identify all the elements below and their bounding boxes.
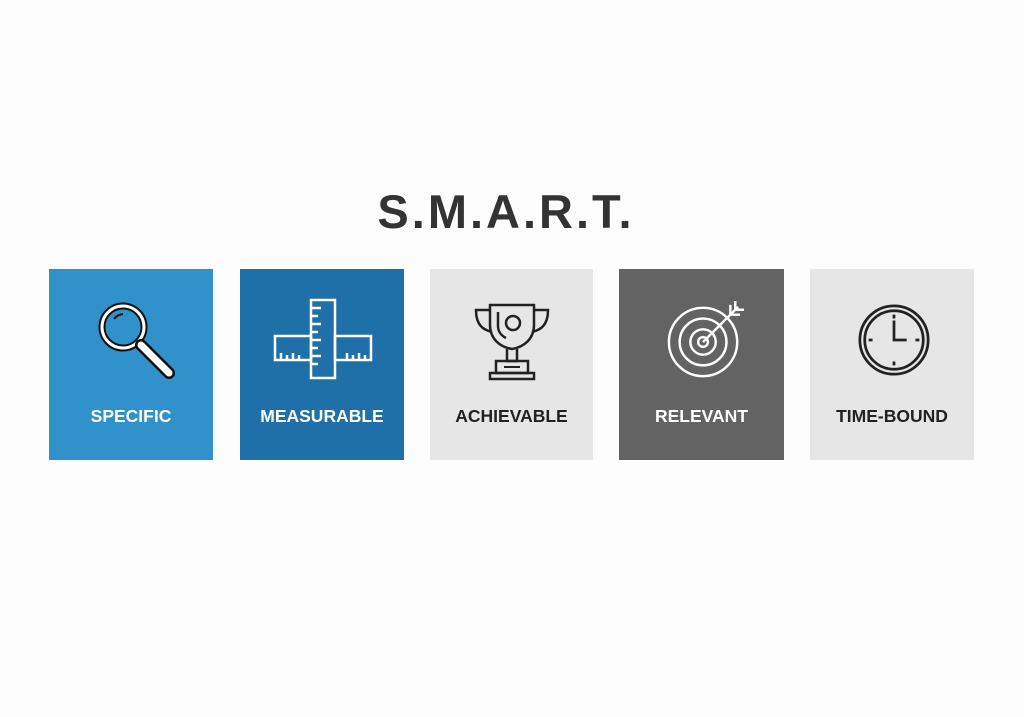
label: TIME-BOUND — [836, 406, 948, 426]
panel: specific — [49, 269, 213, 460]
icon: target — [668, 301, 744, 378]
panel: achievable — [430, 269, 593, 460]
icon: rulers — [274, 298, 372, 380]
panel: relevant — [619, 269, 784, 460]
panel: time-bound — [810, 269, 974, 460]
label: ACHIEVABLE — [455, 406, 568, 426]
icon: clock — [858, 304, 930, 376]
icon: trophy — [474, 304, 550, 380]
label: MEASURABLE — [260, 406, 384, 426]
panel: measurable — [240, 269, 404, 460]
label: RELEVANT — [655, 406, 748, 426]
title: S.M.A.R.T. — [377, 185, 635, 238]
label: SPECIFIC — [91, 406, 171, 426]
icon: magnifier — [98, 302, 175, 379]
